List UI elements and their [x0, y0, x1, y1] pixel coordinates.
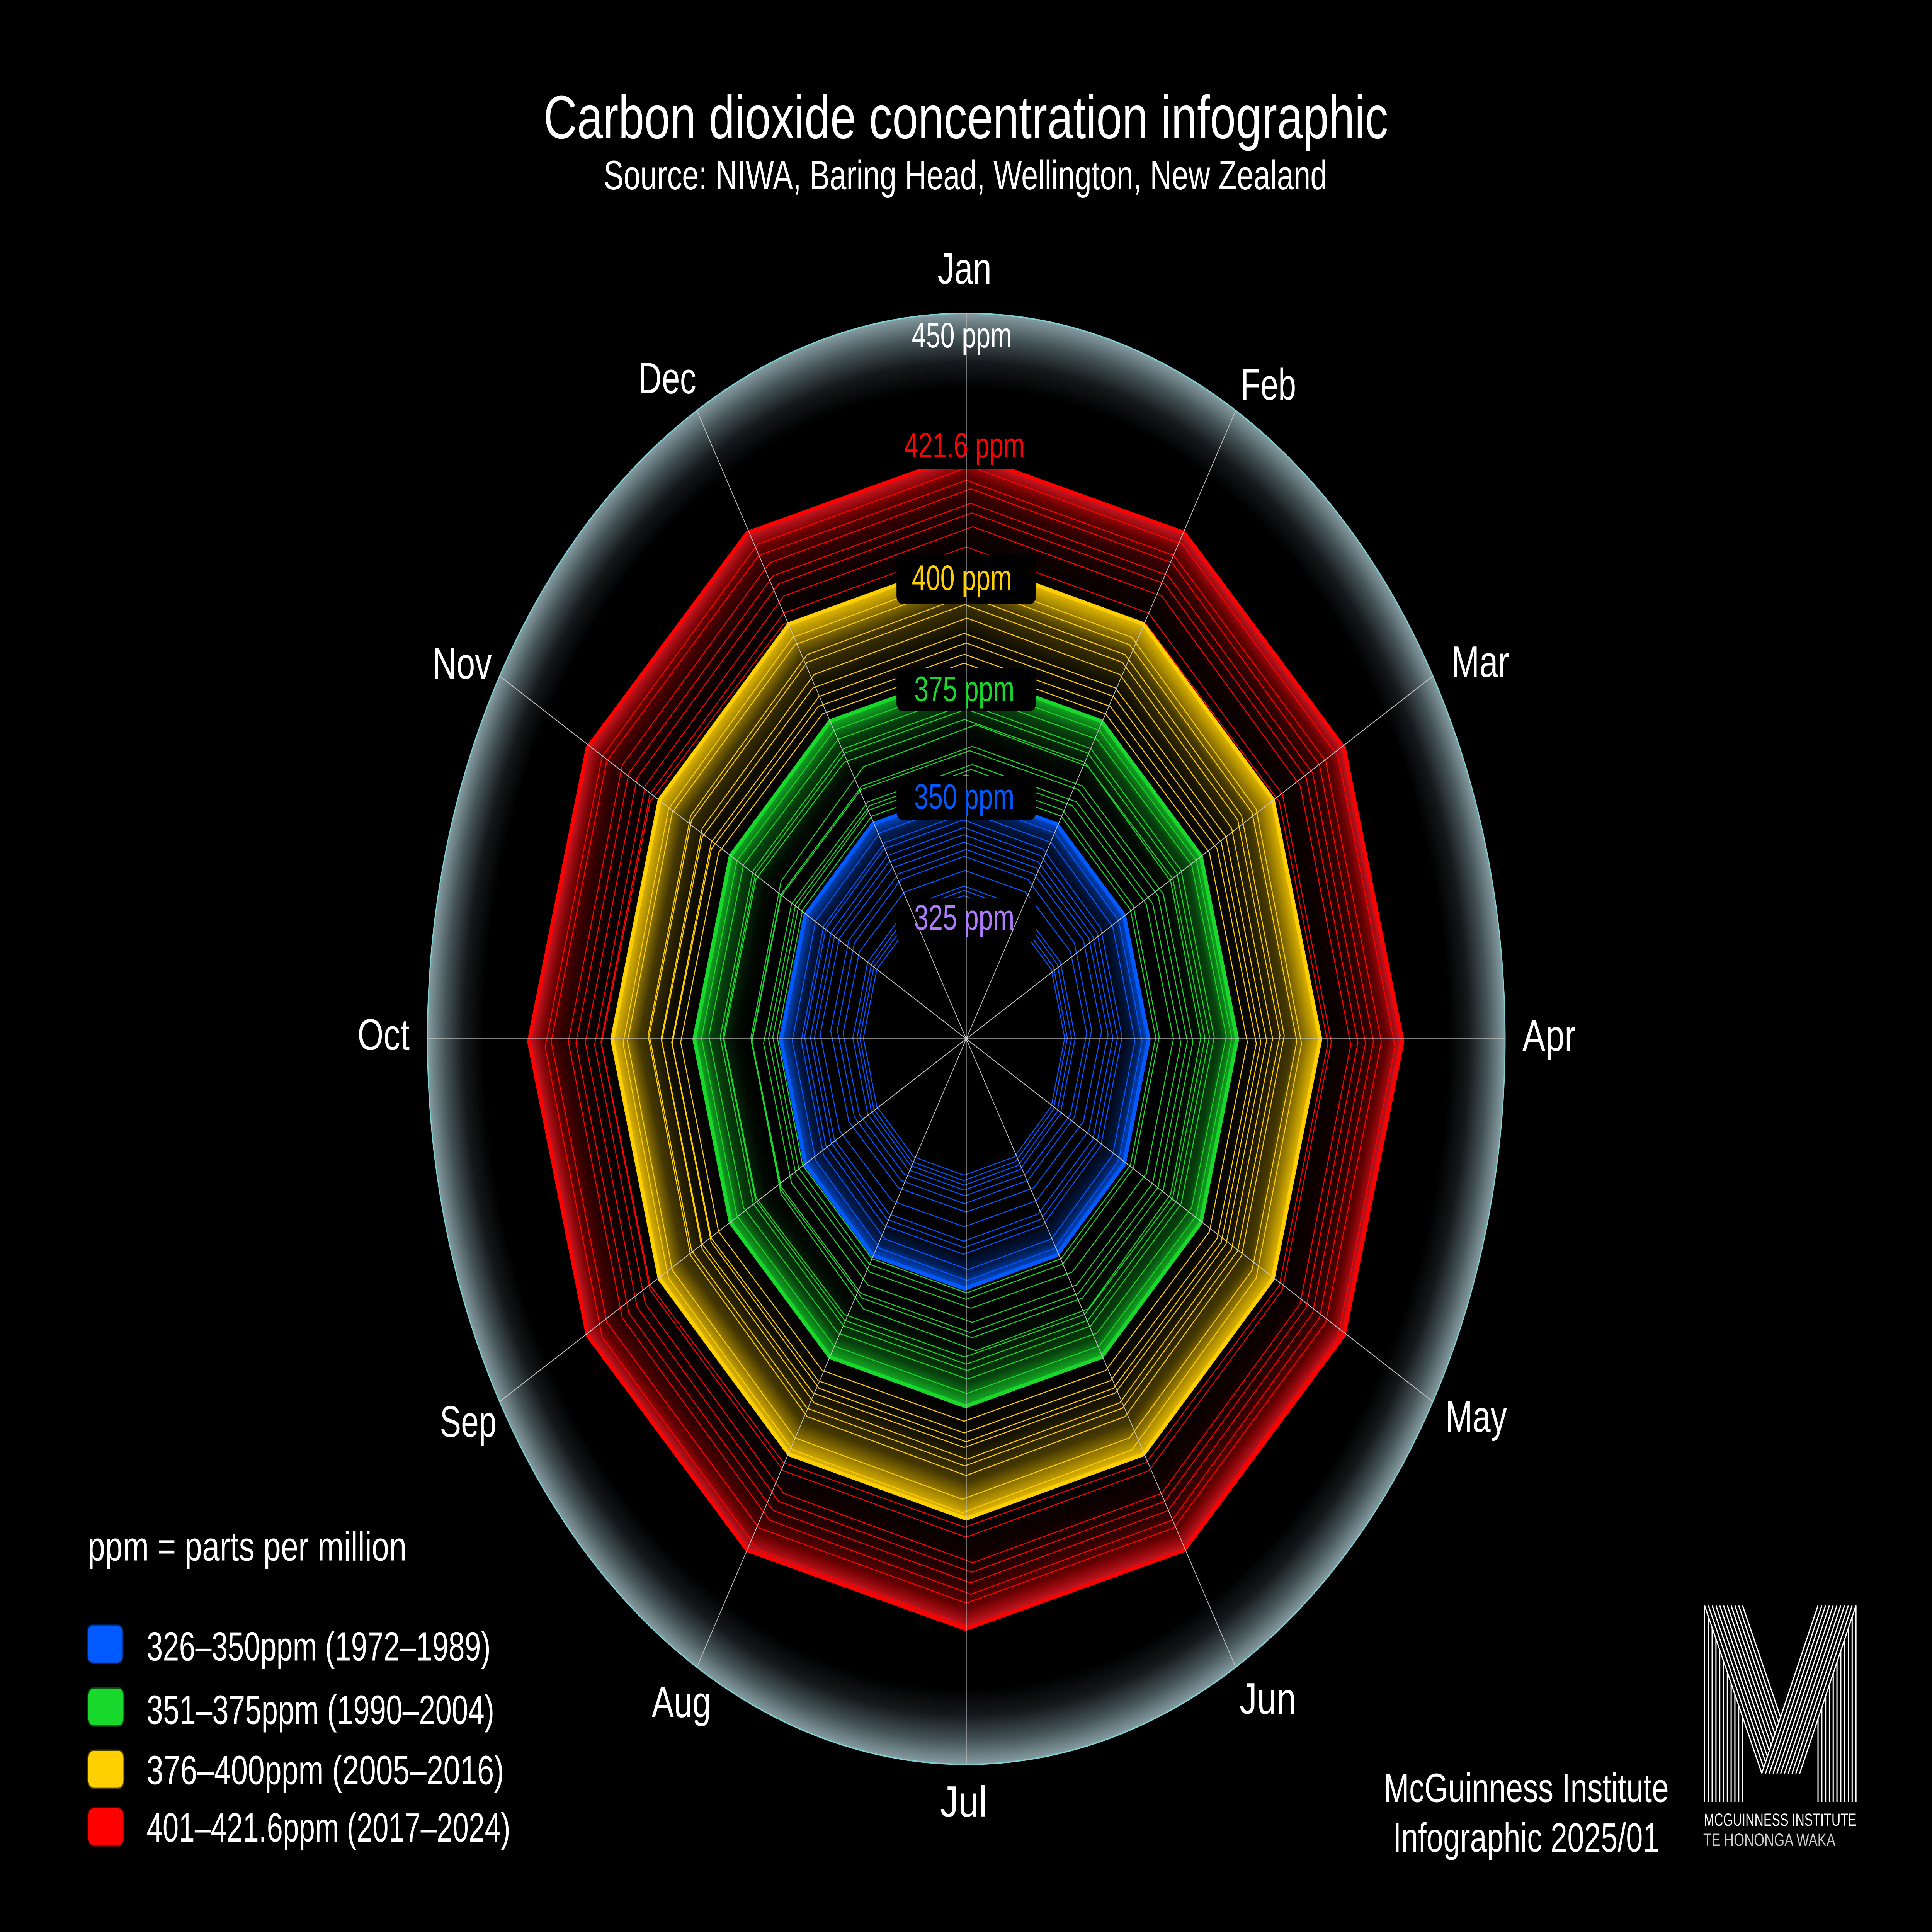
- month label: Jun: Jun: [1240, 1674, 1296, 1723]
- legend: [88, 1524, 510, 1850]
- month label: May: May: [1445, 1393, 1507, 1442]
- title: Carbon dioxide concentration infographic: [544, 83, 1388, 151]
- radar chart rings: [478, 386, 1453, 1697]
- outer circle: 450 ppm boundary: [427, 313, 1505, 1764]
- blue band: 326-350 ppm (1972-1989): [759, 762, 1170, 1318]
- legend swatch: red: [88, 1808, 123, 1845]
- legend swatch: green: [88, 1689, 123, 1725]
- month label: Oct: Oct: [357, 1010, 410, 1060]
- month label: Jan: Jan: [937, 244, 992, 293]
- yellow band: 376-400 ppm (2005-2016): [571, 504, 1361, 1574]
- month label: Aug: Aug: [652, 1678, 711, 1727]
- green band: 351-375 ppm (1990-2004): [663, 629, 1269, 1449]
- month spokes: [427, 313, 1505, 1765]
- legend note: ppm = parts per million: [88, 1524, 406, 1569]
- logo text: name: MCGUINNESS INSTITUTE: [1704, 1810, 1856, 1830]
- ppm label: 400: 400 ppm: [912, 558, 1012, 598]
- legend text: blue: 326–350ppm (1972–1989): [146, 1624, 491, 1669]
- month label: Feb: Feb: [1241, 360, 1296, 410]
- month label: Nov: Nov: [432, 639, 492, 689]
- logo: striped M: [1704, 1605, 1856, 1802]
- month label: Dec: Dec: [638, 354, 696, 403]
- legend text: green: 351–375ppm (1990–2004): [146, 1687, 494, 1733]
- ppm label: 375: 375 ppm: [914, 670, 1014, 709]
- ppm label: 325: 325 ppm: [914, 898, 1014, 937]
- ppm label: 421.6: 421.6 ppm: [904, 426, 1025, 466]
- ppm label: 350: 350 ppm: [914, 777, 1014, 817]
- legend swatch: yellow: [88, 1751, 123, 1788]
- month label: Mar: Mar: [1451, 638, 1509, 687]
- legend text: yellow: 376–400ppm (2005–2016): [146, 1747, 504, 1793]
- month label: Sep: Sep: [440, 1397, 497, 1447]
- legend swatch: blue: [88, 1626, 122, 1663]
- subtitle: source: Source: NIWA, Baring Head, Wellington, New Zealand: [604, 152, 1327, 198]
- month label: Jul: Jul: [940, 1777, 987, 1827]
- black backing boxes behind ppm labels: [896, 425, 1036, 942]
- footer credit: line 2: Infographic 2025/01: [1393, 1815, 1660, 1860]
- ppm label: 450: 450 ppm: [912, 316, 1012, 355]
- month label: Apr: Apr: [1522, 1012, 1576, 1061]
- logo text: te reo name: TE HONONGA WAKA: [1703, 1830, 1835, 1850]
- footer credit: line 1: McGuinness Institute: [1384, 1765, 1669, 1811]
- red band: 401-421.6 ppm (2017-2024): [478, 386, 1453, 1697]
- legend text: red: 401–421.6ppm (2017–2024): [146, 1805, 510, 1850]
